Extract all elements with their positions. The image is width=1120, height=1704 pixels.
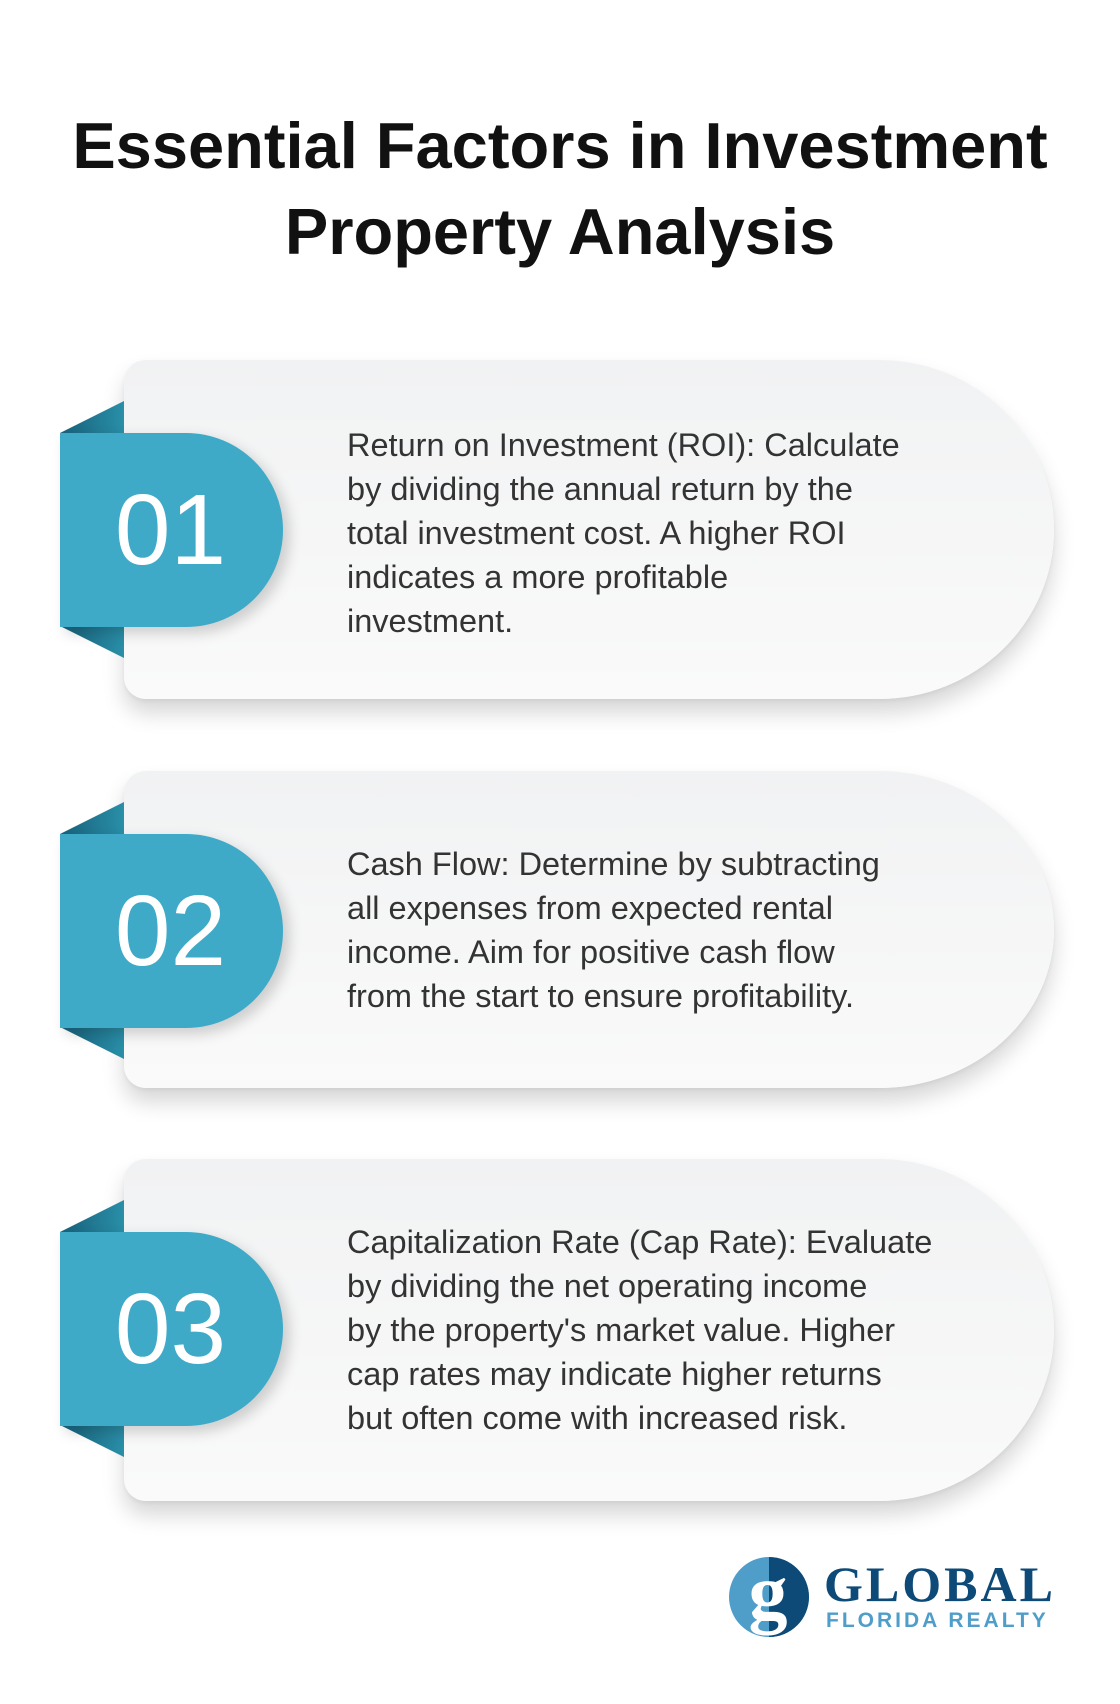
text: ROI: investment.	[347, 603, 513, 639]
icon: fold bottom 2	[62, 1028, 124, 1059]
text: cash flow	[347, 846, 880, 1014]
logo: Global Florida Realty	[729, 1556, 1056, 1637]
text: ROI: total investment cost. A higher ROI	[347, 515, 846, 551]
panel: card 1 ROI	[124, 360, 1054, 699]
text: ROI: Return on Investment (ROI): Calculate	[347, 427, 900, 463]
text: cap rate: by the property's market value. Higher	[347, 1312, 895, 1348]
text: cash flow: income. Aim for positive cash flow	[347, 934, 835, 970]
text: cap rate: but often come with increased risk.	[347, 1400, 847, 1436]
text: cap rate: cap rates may indicate higher returns	[347, 1356, 882, 1392]
badge 02: 02	[115, 875, 226, 987]
icon: fold top 2	[60, 802, 124, 834]
text: cap rate: by dividing the net operating income	[347, 1268, 867, 1304]
badge 02	[60, 834, 283, 1028]
panel: card 2 cash flow	[124, 771, 1054, 1088]
icon: fold top 1	[60, 401, 124, 433]
badge 03: 03	[115, 1273, 226, 1385]
badge 01	[60, 433, 283, 627]
panel: card 3 cap rate	[124, 1159, 1054, 1501]
text: cash flow: from the start to ensure profitability.	[347, 978, 854, 1014]
badge 01: 01	[115, 474, 226, 586]
text: FLORIDA REALTY: FLORIDA REALTY	[826, 1609, 1049, 1632]
title: Property Analysis	[285, 195, 835, 268]
text: ROI	[347, 427, 900, 639]
icon: fold bottom 1	[62, 627, 124, 658]
text: GLOBAL: GLOBAL	[824, 1556, 1056, 1612]
title: Essential Factors in Investment	[72, 109, 1048, 182]
text: ROI: indicates a more profitable	[347, 559, 728, 595]
badge 03	[60, 1232, 283, 1426]
icon: fold bottom 3	[62, 1426, 124, 1457]
icon: fold top 3	[60, 1200, 124, 1232]
title	[72, 109, 1048, 268]
text: cash flow: Cash Flow: Determine by subtracting	[347, 846, 880, 882]
text: ROI: by dividing the annual return by the	[347, 471, 853, 507]
icon: g circle	[729, 1556, 809, 1637]
text: cap rate: Capitalization Rate (Cap Rate): Evaluate	[347, 1224, 932, 1260]
text: cash flow: all expenses from expected rental	[347, 890, 833, 926]
text: cap rate	[347, 1224, 932, 1436]
